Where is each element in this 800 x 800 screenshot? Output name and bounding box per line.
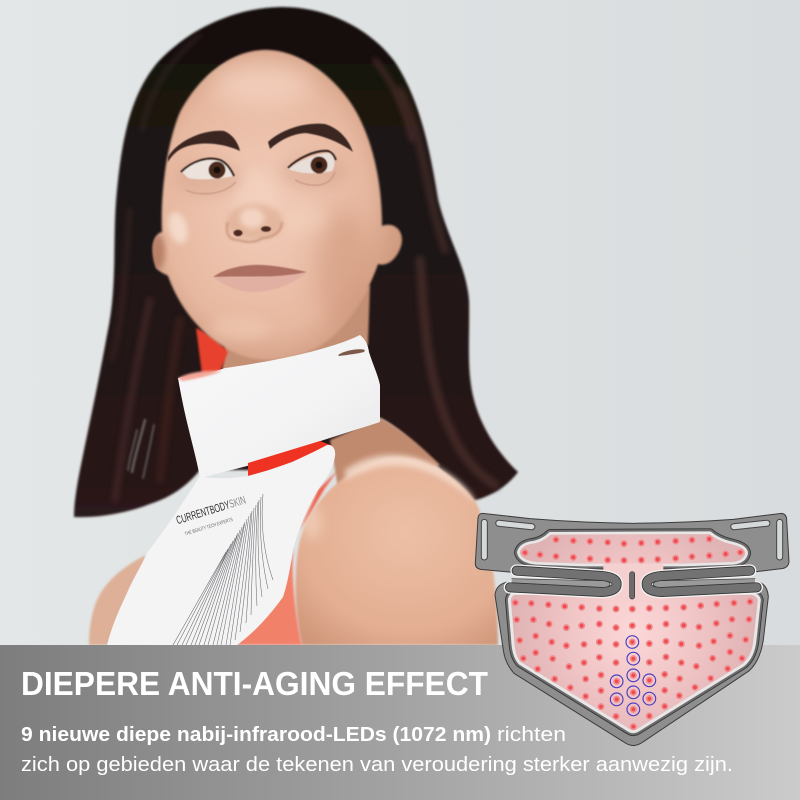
red glow at collar rim — [178, 371, 222, 381]
bottom caption band — [0, 645, 800, 800]
nine deep near-infrared LEDs — [610, 636, 656, 716]
face — [153, 50, 402, 360]
photo: woman wearing LED neck device — [74, 7, 518, 645]
lips — [213, 265, 307, 292]
fan line pattern — [173, 494, 273, 645]
left shoulder — [89, 555, 146, 645]
central connector between pads — [603, 563, 663, 600]
right shoulder — [296, 457, 498, 645]
red-lit chest skin — [236, 548, 302, 645]
right tongue — [647, 571, 757, 592]
neck device: chest bib — [107, 445, 335, 645]
eyebrows — [168, 124, 353, 162]
neck device: collar — [178, 335, 380, 478]
face shading and highlights — [151, 63, 373, 340]
brand logo on device: THE BEAUTY TECH EXPERTS — [184, 517, 234, 537]
lower pad — [509, 593, 759, 732]
hair — [74, 7, 518, 517]
body text: zich op gebieden waar de tekenen van veroudering sterker aanwezig zijn. — [21, 754, 733, 776]
left tongue — [510, 571, 617, 592]
heading: DIEPERE ANTI-AGING EFFECT — [21, 665, 488, 702]
lower frame outer — [495, 582, 768, 745]
neck skin right of collar — [330, 418, 440, 500]
body text — [21, 724, 733, 776]
left eye — [181, 159, 236, 194]
lower pad ring — [509, 593, 759, 732]
brand logo on device: CURRENTBODYSKIN — [175, 495, 247, 527]
strap slots — [481, 519, 783, 560]
upper pad ring — [518, 533, 747, 565]
brand logo on device — [175, 495, 251, 539]
neck skin — [222, 285, 370, 372]
upper pad — [518, 533, 747, 565]
centre slit — [630, 572, 635, 599]
nose — [227, 204, 283, 242]
red glow under chin — [196, 328, 228, 374]
LED mask diagram — [475, 513, 789, 745]
right eye — [288, 151, 336, 185]
LED dots — [513, 536, 753, 729]
body text: richten — [497, 724, 566, 746]
collar slot — [338, 349, 365, 356]
red glow in gap — [248, 441, 333, 476]
body text: 9 nieuwe diepe nabij-infrarood-LEDs (1072 nm) — [21, 724, 491, 746]
shoulder highlights — [303, 455, 478, 540]
hair reddish strands — [112, 35, 495, 500]
upper strap outer — [475, 513, 789, 574]
